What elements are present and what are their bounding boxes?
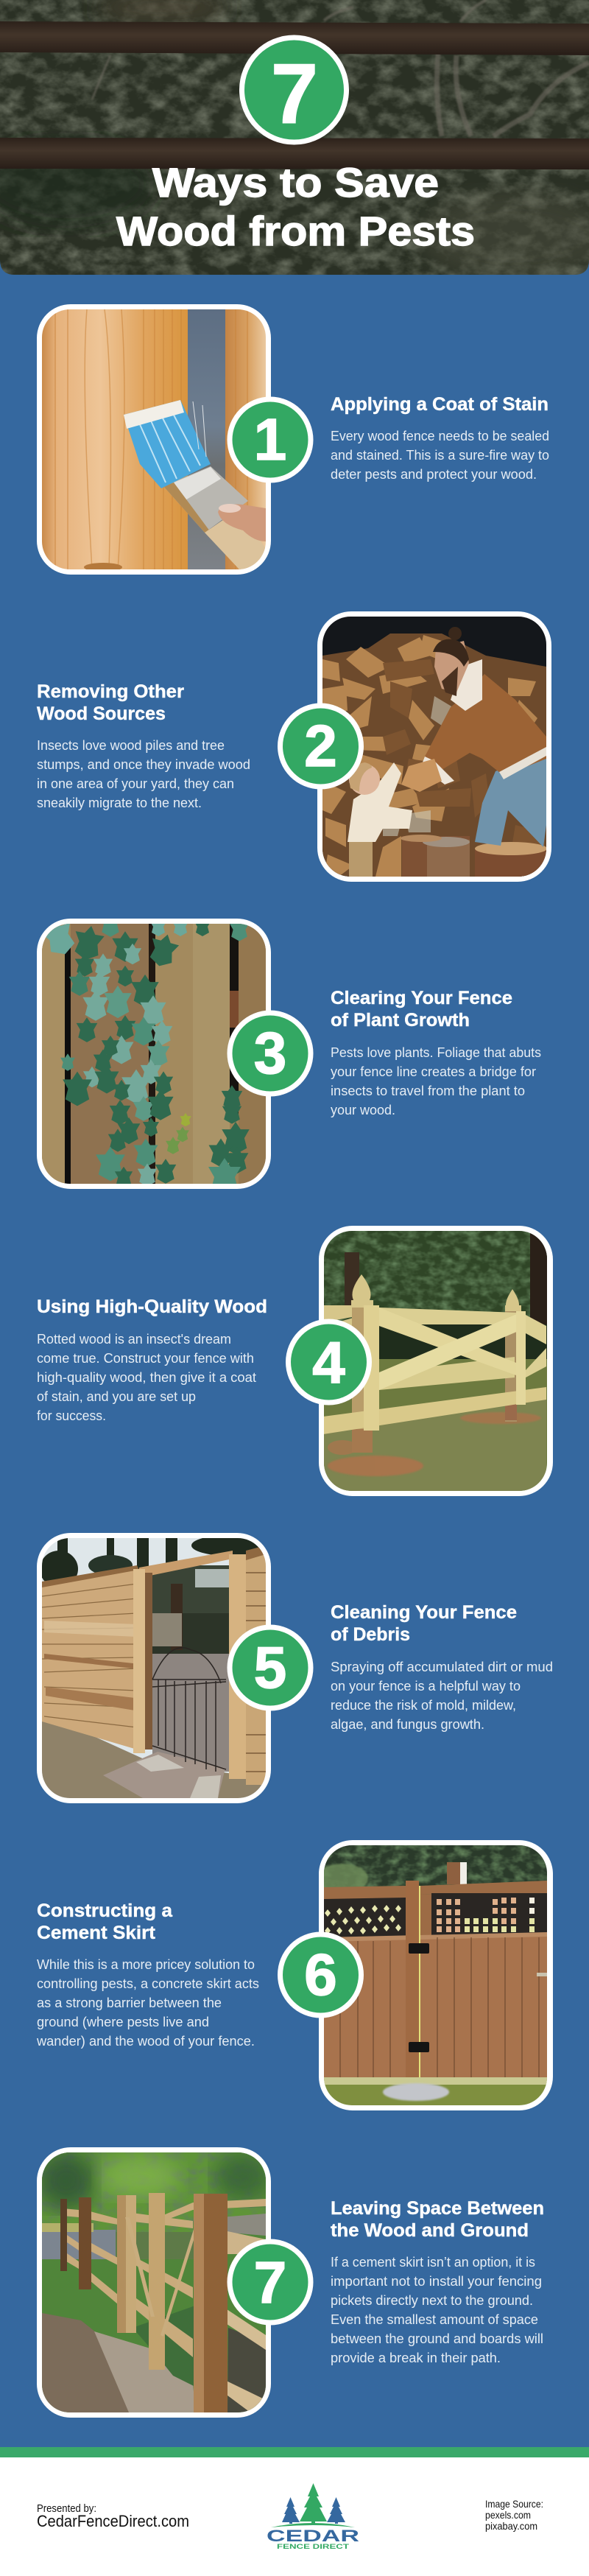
image source: pexels.com <box>485 2509 531 2521</box>
body text: If a cement skirt isn’t an option, it is <box>331 2255 535 2270</box>
heading: of Plant Growth <box>331 1010 470 1031</box>
photo card: man and child stacking firewood <box>317 611 551 882</box>
badge 7 <box>227 2239 314 2325</box>
body text <box>37 1332 256 1423</box>
body text: your wood. <box>331 1103 395 1117</box>
body text: between the ground and boards will <box>331 2331 543 2346</box>
logo: Cedar Fence Direct <box>267 2483 359 2550</box>
image source: Image Source: <box>485 2498 543 2510</box>
body text: provide a break in their path. <box>331 2351 501 2365</box>
body text: come true. Construct your fence with <box>37 1351 254 1366</box>
heading: Constructing a <box>37 1901 173 1921</box>
body text <box>331 429 549 482</box>
body text: wander) and the wood of your fence. <box>36 2034 255 2049</box>
body text: stumps, and once they invade wood <box>37 757 250 772</box>
body text <box>331 1660 553 1732</box>
body text: pickets directly next to the ground. <box>331 2293 533 2308</box>
badge 7: 7 <box>254 2250 286 2315</box>
badge 1 <box>227 396 314 483</box>
panel: step 1 <box>37 304 549 575</box>
body text: on your fence is a helpful way to <box>331 1679 521 1694</box>
heading <box>331 988 512 1031</box>
body text: deter pests and protect your wood. <box>331 467 537 482</box>
body text: Every wood fence needs to be sealed <box>331 429 549 443</box>
body text: in one area of your yard, they can <box>37 776 234 791</box>
photo card: ivy on fence <box>37 912 271 1196</box>
panel: step 5 <box>37 1533 553 1803</box>
image source <box>485 2498 543 2532</box>
footer <box>0 2447 589 2576</box>
heading: the Wood and Ground <box>331 2220 529 2241</box>
body text: insects to travel from the plant to <box>331 1084 525 1098</box>
heading: of Debris <box>331 1624 410 1645</box>
body text <box>331 2255 543 2365</box>
body text <box>37 738 250 810</box>
body text: important not to install your fencing <box>331 2274 542 2289</box>
presented by: CedarFenceDirect.com <box>37 2512 189 2530</box>
panel: step 6 <box>36 1840 553 2110</box>
badge 3 <box>227 1011 314 1096</box>
photo card: brush staining wood <box>37 304 271 575</box>
title number badge: 7 <box>271 47 318 141</box>
body text: Even the smallest amount of space <box>331 2312 538 2327</box>
title <box>116 159 475 254</box>
title number badge <box>239 35 349 144</box>
photo card: crossbuck wood fence <box>319 1226 553 1496</box>
badge 2: 2 <box>304 713 337 779</box>
heading: Applying a Coat of Stain <box>331 394 549 415</box>
badge 4 <box>286 1319 372 1405</box>
header photo: fence rails over foliage <box>0 0 589 280</box>
title: Wood from Pests <box>116 208 475 254</box>
body text <box>36 1957 259 2049</box>
body text: high-quality wood, then give it a coat <box>37 1370 256 1385</box>
body text: of stain, and you are set up <box>37 1389 196 1404</box>
badge 4: 4 <box>312 1330 345 1395</box>
body text: Rotted wood is an insect's dream <box>37 1332 231 1347</box>
badge 6 <box>278 1931 364 2018</box>
logo: Cedar Fence Direct: CEDAR <box>267 2527 359 2545</box>
header panel <box>0 0 589 280</box>
body text: ground (where pests live and <box>37 2015 209 2029</box>
heading: Removing Other <box>37 681 184 702</box>
presented by <box>37 2502 189 2530</box>
panel: step 3 <box>37 912 541 1196</box>
logo: Cedar Fence Direct: FENCE DIRECT <box>277 2543 350 2550</box>
body text: While this is a more pricey solution to <box>37 1957 255 1972</box>
panel: step 4 <box>37 1226 553 1496</box>
presented by: Presented by: <box>37 2502 96 2515</box>
body text: reduce the risk of mold, mildew, <box>331 1698 516 1713</box>
heading <box>37 681 184 724</box>
heading: Clearing Your Fence <box>331 988 512 1008</box>
heading: Leaving Space Between <box>331 2198 544 2219</box>
badge 1: 1 <box>254 407 286 472</box>
heading: Using High-Quality Wood <box>37 1296 267 1317</box>
panel: step 7 <box>37 2147 544 2418</box>
badge 6: 6 <box>304 1942 337 2007</box>
body text <box>331 1045 541 1117</box>
heading <box>331 1602 517 1645</box>
body text: sneakily migrate to the next. <box>37 796 202 810</box>
firewood log ends <box>383 696 453 836</box>
panel: step 2 <box>37 611 551 882</box>
heading <box>37 1901 173 1943</box>
title: Ways to Save <box>152 159 439 206</box>
heading: Wood Sources <box>37 703 166 724</box>
body text: controlling pests, a concrete skirt acts <box>37 1976 259 1991</box>
body text: Spraying off accumulated dirt or mud <box>331 1660 553 1674</box>
image source: pixabay.com <box>485 2520 537 2532</box>
body text: and stained. This is a sure-fire way to <box>331 448 549 463</box>
body text: Insects love wood piles and tree <box>37 738 225 753</box>
badge 5 <box>227 1625 314 1710</box>
photo card: horizontal cedar fence with gate <box>37 1533 271 1803</box>
body text: Pests love plants. Foliage that abuts <box>331 1045 541 1060</box>
body text: your fence line creates a bridge for <box>331 1064 536 1079</box>
badge 2 <box>278 703 364 790</box>
badge 3: 3 <box>254 1020 286 1086</box>
badge 5: 5 <box>254 1635 286 1700</box>
body text: as a strong barrier between the <box>37 1996 222 2010</box>
photo card: split-rail fence <box>37 2147 272 2418</box>
heading <box>331 2198 544 2241</box>
photo card: brown composite fence gate <box>317 1840 553 2110</box>
heading: Cement Skirt <box>37 1923 156 1943</box>
body text: algae, and fungus growth. <box>331 1717 484 1732</box>
heading: Cleaning Your Fence <box>331 1602 517 1623</box>
body text: for success. <box>37 1408 106 1423</box>
